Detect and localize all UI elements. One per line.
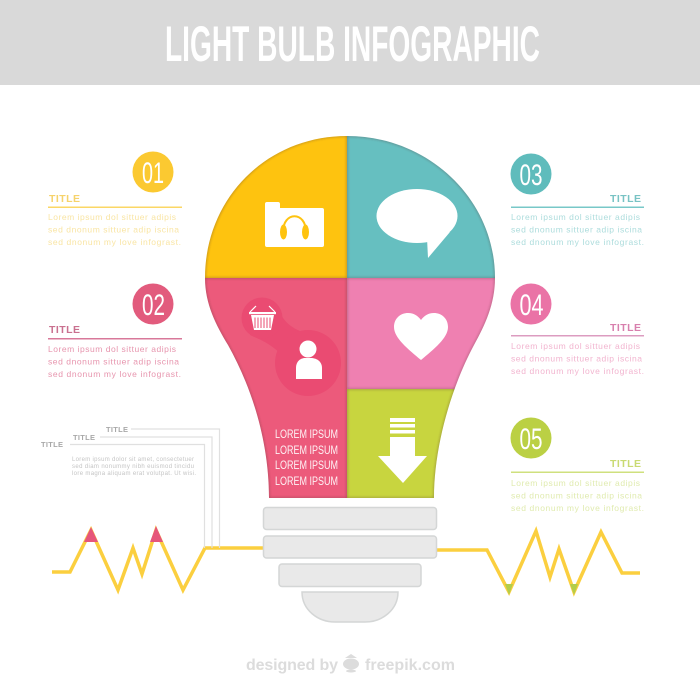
text 04 — [511, 341, 644, 376]
callout title 2: TITLE — [73, 433, 95, 442]
heading 03: TITLE — [610, 193, 641, 205]
text 05: sed dnonum my love infograst. — [511, 503, 644, 513]
red segment text — [275, 429, 338, 488]
red segment text: LOREM IPSUM — [275, 429, 338, 441]
callout body text: lore magna aliquam erat volutpat. Ut wisi. — [72, 471, 196, 477]
base ring 2 — [264, 536, 436, 558]
header band — [0, 0, 700, 85]
panel: 03 — [510, 154, 644, 247]
footer credit — [246, 654, 455, 674]
icon: basket — [242, 298, 282, 338]
panel: 02 — [48, 284, 182, 379]
light bulb glass — [200, 130, 500, 500]
connector blob — [250, 304, 300, 355]
bulb base — [264, 508, 436, 622]
text 03: Lorem ipsum dol sittuer adipis — [511, 212, 640, 222]
segment: green — [347, 389, 455, 498]
icon: freepik mascot — [343, 654, 359, 672]
text 03: sed dnonum sittuer adip iscina — [511, 224, 642, 234]
text 04: sed dnonum sittuer adip iscina — [511, 354, 642, 364]
segment: red — [200, 278, 347, 500]
heading 04: TITLE — [610, 322, 641, 334]
grey callout lines — [70, 429, 220, 548]
icon: user — [275, 330, 341, 396]
badge 01: 01 — [142, 157, 164, 190]
text 02: sed dnonum my love infograst. — [48, 369, 181, 379]
icon: down arrow — [378, 418, 427, 483]
text 01 — [48, 212, 181, 247]
text 02: sed dnonum sittuer adip iscina — [48, 356, 179, 366]
badge 02: 02 — [142, 289, 165, 322]
heading 05: TITLE — [610, 458, 641, 470]
text 04: Lorem ipsum dol sittuer adipis — [511, 341, 640, 351]
text 05: sed dnonum sittuer adip iscina — [511, 490, 642, 500]
panel: 04 — [510, 284, 644, 376]
text 01: sed dnonum my love infograst. — [48, 237, 181, 247]
red peak left 1 — [84, 527, 98, 542]
text 02 — [48, 344, 181, 379]
badge 04: 04 — [520, 289, 544, 322]
panel: 01 — [48, 152, 182, 247]
text 04: sed dnonum my love infograst. — [511, 366, 644, 376]
red segment text: LOREM IPSUM — [275, 476, 338, 488]
segment: teal — [347, 130, 500, 278]
text 05: Lorem ipsum dol sittuer adipis — [511, 478, 640, 488]
callout body text — [72, 457, 196, 477]
icon: folder with headphones — [265, 202, 324, 247]
footer credit: designed by — [246, 657, 338, 674]
text 03 — [511, 212, 644, 247]
callout title 1: TITLE — [106, 425, 128, 434]
text 01: sed dnonum sittuer adip iscina — [48, 224, 179, 234]
text 03: sed dnonum my love infograst. — [511, 237, 644, 247]
panel: 05 — [510, 418, 644, 513]
red segment text: LOREM IPSUM — [275, 445, 338, 457]
callout titles and text — [41, 425, 196, 477]
callout title 3: TITLE — [41, 440, 63, 449]
icon group: basket and user — [242, 298, 341, 396]
segment: yellow — [200, 130, 347, 278]
text 01: Lorem ipsum dol sittuer adipis — [48, 212, 176, 222]
red segment text: LOREM IPSUM — [275, 460, 338, 472]
text 05 — [511, 478, 644, 513]
icon: heart — [394, 313, 448, 360]
green tip right 1 — [505, 584, 513, 595]
badge 03: 03 — [520, 159, 542, 192]
heading 02: TITLE — [49, 324, 80, 336]
badge 05: 05 — [520, 423, 542, 456]
base cap — [302, 592, 398, 622]
connector line left — [52, 526, 265, 590]
green tip right 2 — [570, 584, 578, 595]
text 02: Lorem ipsum dol sittuer adipis — [48, 344, 176, 354]
heading 01: TITLE — [49, 193, 80, 205]
red peak left 2 — [150, 526, 163, 542]
segment: pink — [347, 278, 500, 389]
icon: speech bubble — [376, 189, 458, 258]
footer credit: freepik.com — [365, 657, 455, 674]
connector line right — [435, 531, 640, 595]
base ring 1 — [264, 508, 436, 530]
callout body text: sed diam nonummy nibh euismod tincidu — [72, 464, 194, 470]
callout body text: Lorem ipsum dolor sit amet, consectetuer — [72, 457, 194, 463]
base ring 3 — [279, 564, 421, 586]
